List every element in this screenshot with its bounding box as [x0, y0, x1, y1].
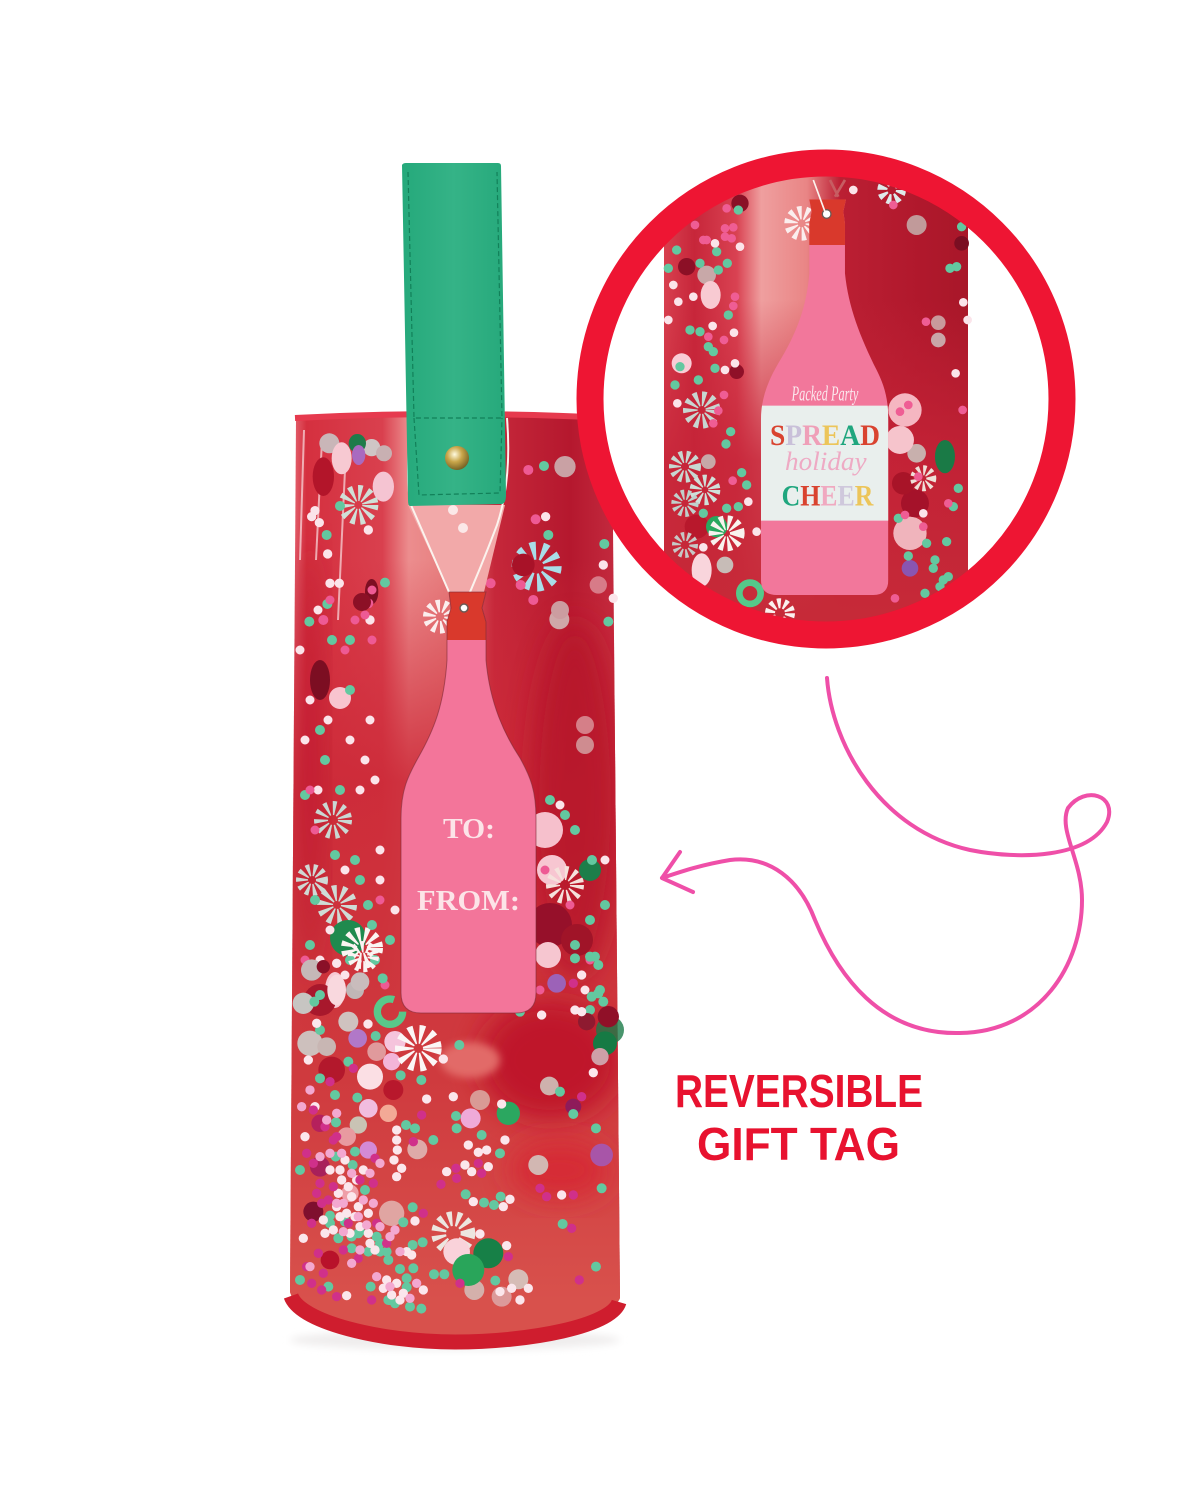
- floor shadow: [290, 1330, 620, 1350]
- brand script: Packed Party: [791, 384, 859, 406]
- confetti: lower body: [293, 947, 619, 1309]
- wine bottle bag: main product: [285, 410, 625, 1350]
- SPREAD: SPREAD: [770, 420, 880, 452]
- inset confetti: [668, 181, 969, 623]
- caption: reversible gift tag: [675, 1065, 923, 1170]
- holiday: holiday: [785, 446, 867, 476]
- callout circle: reverse of gift tag: [577, 150, 1075, 650]
- tag label: TO: TO:: [443, 813, 495, 845]
- tag neck and string behind strap: [408, 418, 508, 608]
- bag rim bottom: [291, 1296, 619, 1342]
- pink looping arrow: [662, 678, 1109, 1033]
- gift tag: TO / FROM: [400, 592, 536, 1014]
- caption: reversible gift tag: REVERSIBLE: [675, 1065, 923, 1117]
- CHEER: CHEER: [782, 481, 874, 513]
- red ring: [590, 163, 1062, 635]
- caption: reversible gift tag: GIFT TAG: [697, 1118, 900, 1170]
- confetti: upper body: [309, 433, 613, 629]
- green felt strap with rivet: [402, 163, 506, 506]
- rivet: [445, 446, 469, 470]
- bag rim top: [295, 414, 612, 418]
- bag body: [285, 410, 625, 1350]
- inset tag: [757, 180, 893, 600]
- confetti: middle body: [300, 590, 624, 1044]
- tag label: FROM: FROM:: [417, 885, 520, 917]
- product infographic canvas: [284, 150, 1112, 1350]
